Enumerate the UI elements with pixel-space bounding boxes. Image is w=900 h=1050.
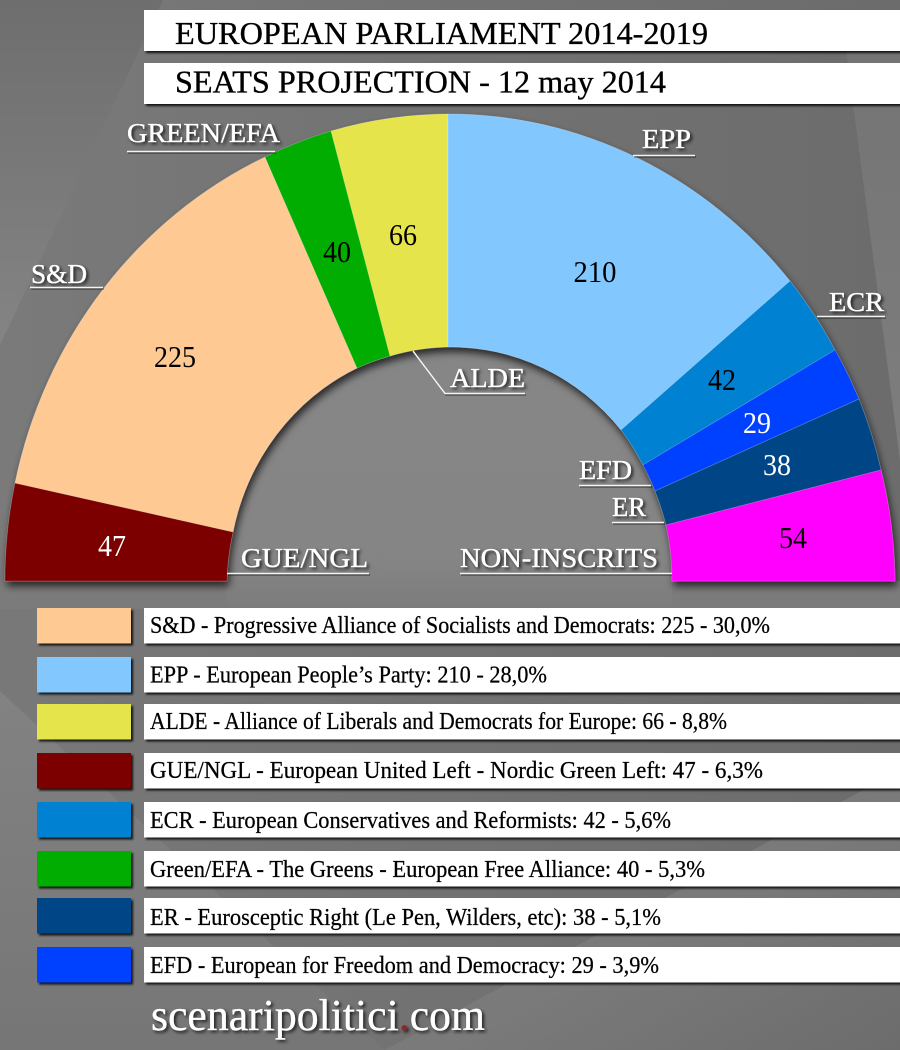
number: ALDE 66: 66 (389, 217, 417, 252)
number: GUE 47: 47 (98, 528, 126, 563)
number: EFD 29: 29 (743, 405, 771, 440)
segment: EFD (643, 350, 859, 491)
label: EPP: EPP (642, 124, 691, 154)
number: NI 54: 54 (779, 520, 807, 555)
legend row: GUE/NGL: GUE/NGL - European United Left - Nordic Green Left: 47 - 6,3% (150, 758, 763, 784)
label: EPP (633, 124, 696, 157)
title bar 2 (144, 63, 900, 104)
label: ER (612, 492, 665, 524)
label: ALDE (413, 351, 526, 395)
title bar 1: EUROPEAN PARLIAMENT 2014-2019 (175, 15, 708, 51)
label: NON-INSCRITS: NON-INSCRITS (460, 543, 658, 573)
legend (37, 608, 900, 982)
number: ER 38: 38 (763, 447, 791, 482)
legend row: ECR: ECR - European Conservatives and Reformists: 42 - 5,6% (150, 808, 671, 834)
segment: ER (655, 399, 881, 525)
number: Green 40: 40 (323, 234, 351, 269)
label: ALDE: ALDE (450, 363, 525, 393)
legend row: ER (37, 898, 900, 934)
label: EFD: EFD (579, 455, 632, 485)
legend row: ECR (37, 802, 900, 838)
title bar 1 (144, 10, 900, 51)
legend row: S&D (37, 608, 900, 644)
title bar 2: SEATS PROJECTION - 12 may 2014 (175, 64, 666, 100)
party labels (30, 118, 886, 575)
legend row: EFD (37, 947, 900, 982)
segment: Non-Inscrits (666, 470, 895, 581)
legend row: GUE/NGL (37, 753, 900, 788)
label: GUE/NGL: GUE/NGL (241, 543, 368, 573)
number: ECR 42: 42 (708, 362, 736, 397)
segment: ALDE (331, 114, 448, 356)
label: ER: ER (612, 492, 646, 522)
label: ECR: ECR (829, 287, 884, 317)
number: S&D 225: 225 (154, 339, 196, 374)
legend row: ALDE (37, 704, 900, 740)
legend row: EFD: EFD - European for Freedom and Democracy: 29 - 3,9% (150, 953, 659, 979)
legend row: Green/EFA: Green/EFA - The Greens - European Free Alliance: 40 - 5,3% (150, 857, 705, 883)
legend row: Green/EFA (37, 851, 900, 886)
legend row: S&D: S&D - Progressive Alliance of Socialists and Democrats: 225 - 30,0% (150, 613, 770, 639)
segment: GUE/NGL (5, 483, 233, 581)
label: EFD (579, 455, 652, 487)
number: EPP 210: 210 (574, 254, 616, 289)
legend row: EPP (37, 657, 900, 692)
footer: site name: scenaripolitici.com (151, 991, 485, 1040)
label: GREEN/EFA: GREEN/EFA (127, 118, 281, 148)
label: S&D: S&D (31, 259, 87, 289)
chart: seats hemicycle (5, 114, 895, 581)
segment: EPP (448, 114, 790, 430)
seat numbers (98, 217, 807, 563)
legend row: ALDE: ALDE - Alliance of Liberals and Democrats for Europe: 66 - 8,8% (150, 709, 727, 735)
legend row: EPP: EPP - European People’s Party: 210 - 28,0% (150, 662, 547, 688)
segment: Green/EFA (265, 131, 390, 368)
segment: S&D (15, 157, 357, 532)
legend row: ER: ER - Eurosceptic Right (Le Pen, Wilders, etc): 38 - 5,1% (150, 905, 661, 931)
title (144, 10, 900, 104)
segment: ECR (621, 281, 835, 465)
